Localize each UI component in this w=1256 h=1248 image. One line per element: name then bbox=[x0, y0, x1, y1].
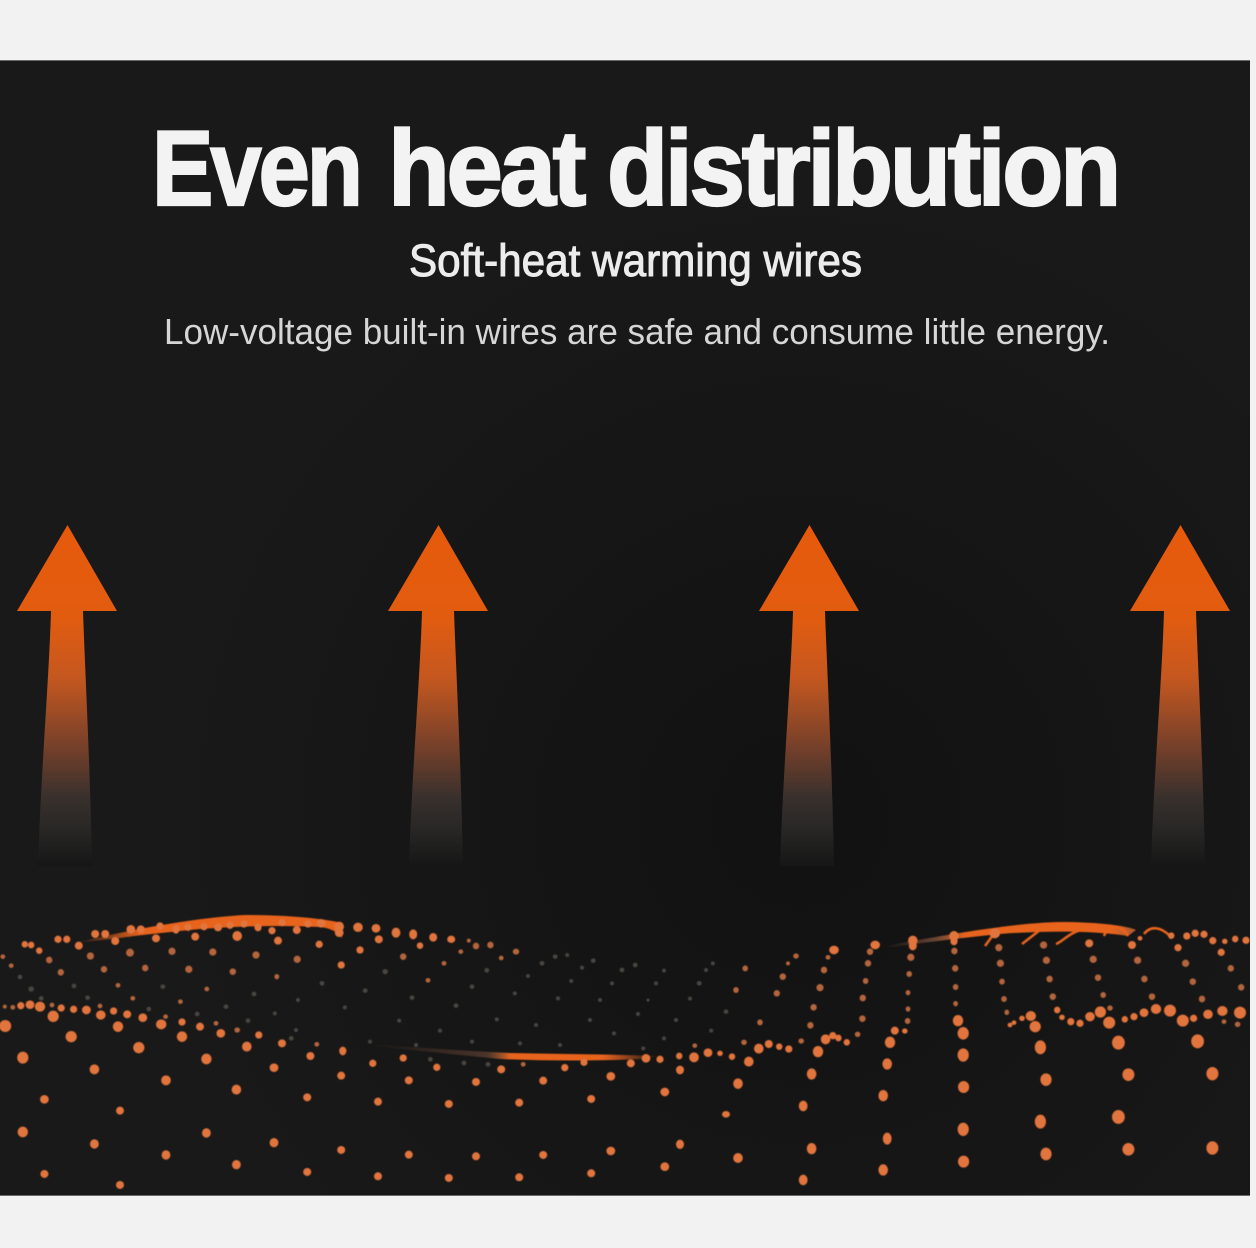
title: Even bbox=[152, 108, 360, 228]
left glowing ridge bbox=[75, 915, 342, 943]
description text: Low-voltage built-in wires are safe and consume little energy. bbox=[164, 311, 1110, 352]
right dots: medium bbox=[692, 941, 1244, 1048]
title: heat bbox=[388, 108, 586, 228]
left dots: medium bbox=[0, 939, 526, 1067]
arrow 3 bbox=[759, 525, 859, 866]
left dots: faint bbox=[18, 953, 624, 1067]
middle glowing streak bbox=[372, 1044, 660, 1060]
dotted heating wire field bbox=[0, 915, 1250, 1189]
arrow 4 bbox=[1130, 525, 1230, 866]
left dots: bright bbox=[0, 919, 615, 1189]
right glowing ridge bbox=[885, 922, 1136, 948]
arrows: heat rising bbox=[17, 525, 1230, 866]
title bbox=[152, 108, 1118, 228]
arrow 1 bbox=[17, 525, 117, 866]
title: distribution bbox=[607, 108, 1118, 228]
right dots: bright bbox=[627, 928, 1250, 1185]
right ridge drips bbox=[985, 927, 1170, 946]
subtitle: Soft-heat warming wires bbox=[409, 235, 862, 286]
arrow 2 bbox=[388, 525, 488, 866]
right dots: faint bbox=[633, 961, 728, 1050]
